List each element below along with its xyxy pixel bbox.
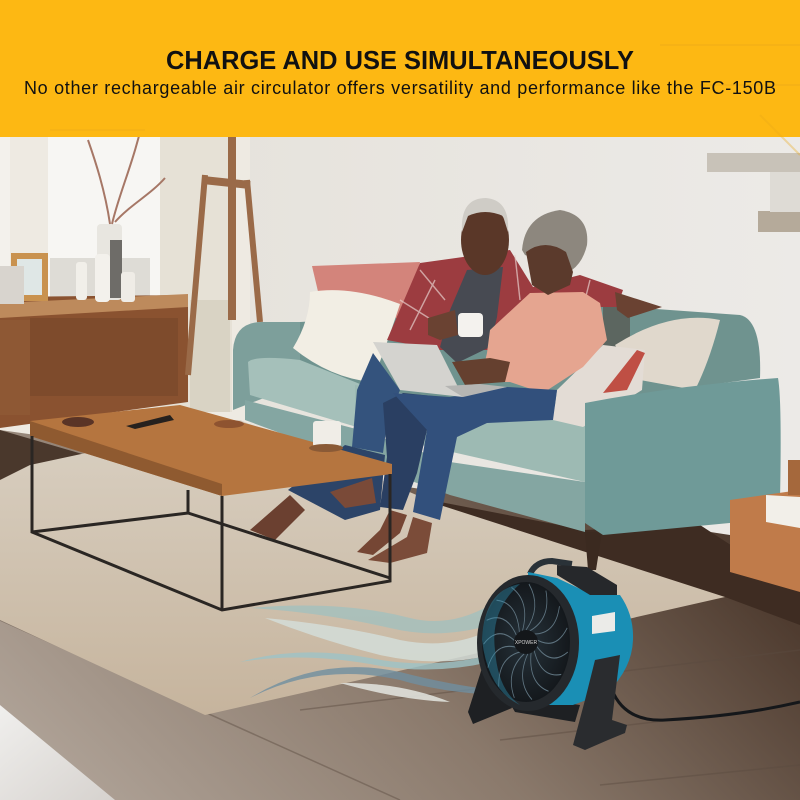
fan hub [514, 630, 538, 654]
woman [452, 210, 607, 393]
coffee table [30, 405, 392, 610]
woman forearm [452, 358, 510, 385]
vases [97, 224, 122, 300]
sofa seat [248, 358, 360, 428]
area rug [0, 420, 725, 715]
man head [461, 205, 509, 275]
fan body [528, 572, 633, 705]
heading: CHARGE AND USE SIMULTANEOUSLY [166, 45, 634, 75]
sofa pillows [293, 262, 720, 427]
fan grille [477, 575, 579, 711]
floor [0, 430, 800, 800]
woman face [526, 245, 573, 295]
feet [250, 495, 305, 540]
picture frames [11, 253, 48, 301]
sofa [233, 305, 760, 570]
window and curtains [0, 137, 232, 412]
man t-shirt [440, 267, 503, 363]
fan control box [557, 565, 617, 595]
subheading: No other rechargeable air circulator offers versatility and performance like the FC-150B [24, 78, 776, 98]
fan blades [483, 584, 569, 701]
man right hand [615, 292, 662, 318]
laptop [373, 342, 507, 397]
fan right stand [573, 655, 627, 750]
power cord [612, 690, 800, 720]
fan left stand [468, 668, 512, 724]
sofa arm [585, 378, 781, 535]
fan label [592, 612, 615, 634]
man shirt [387, 250, 623, 350]
fan translucent air tint [482, 584, 520, 705]
woman hair [522, 210, 587, 270]
magazine rack [730, 460, 800, 592]
floor boards [0, 620, 800, 800]
woman blouse [480, 292, 607, 393]
top banner [0, 0, 800, 155]
man hand on cup [428, 310, 458, 340]
man [387, 198, 662, 363]
fan handle [530, 561, 572, 574]
foreground white furniture edge [0, 705, 115, 800]
fan brand: XPOWER [515, 640, 537, 646]
staircase [707, 153, 800, 232]
wall background [0, 130, 800, 550]
dark floor behind sofa and left [0, 430, 800, 625]
fan product [468, 561, 633, 750]
wooden easel [188, 137, 260, 375]
man and woman legs in jeans [250, 353, 557, 563]
airflow waves [240, 605, 495, 702]
sideboard [0, 110, 188, 428]
